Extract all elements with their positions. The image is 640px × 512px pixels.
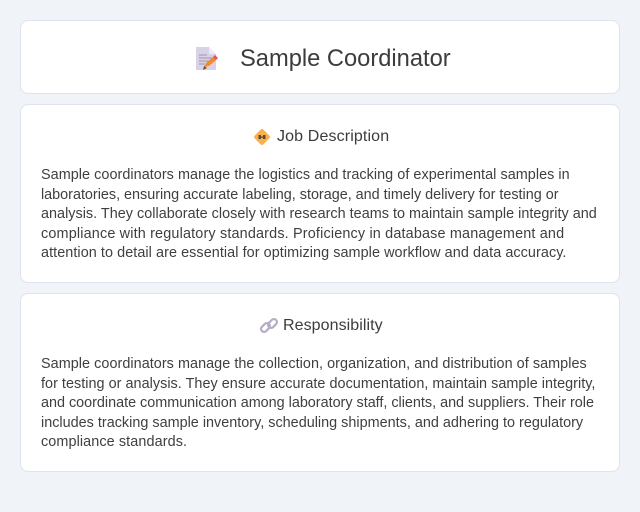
text block: job description: Sample coordinators manage the logistics and tracking of experimental samples in — [41, 167, 570, 183]
text block: responsibility: Sample coordinators manage the collection, organization, and distribution of samples — [41, 356, 587, 372]
heading: responsibility: Responsibility — [283, 317, 383, 334]
icon: orange diamond — [254, 129, 270, 145]
panel: responsibility — [20, 293, 620, 472]
icon: document with pencil — [196, 47, 218, 70]
text block: responsibility: and coordinate communication among laboratory staff, clients, and suppliers. Their role — [41, 395, 594, 411]
title: Sample Coordinator — [240, 46, 451, 72]
text block: responsibility — [41, 356, 595, 450]
text block: responsibility: includes tracking sample inventory, scheduling shipments, and adhering to regulatory — [41, 414, 583, 430]
text block: job description: laboratories, ensuring accurate labeling, storage, and timely delivery for testing or — [41, 186, 558, 202]
text block: job description: attention to detail are essential for optimizing sample workflow and data accuracy. — [41, 245, 566, 261]
text block: responsibility: compliance standards. — [41, 434, 187, 450]
text block: responsibility: for testing or analysis. They ensure accurate documentation, maintain sample integrity, — [41, 376, 595, 392]
heading: job description: Job Description — [277, 128, 389, 145]
text block: job description — [41, 167, 597, 261]
text block: job description: analysis. They collaborate closely with research teams to maintain sample integrity and — [41, 206, 597, 222]
panel: job description — [20, 104, 620, 283]
icon: chain link — [260, 318, 278, 333]
text block: job description: compliance with regulatory standards. Proficiency in database management and — [41, 226, 564, 242]
panel: title card — [20, 20, 620, 94]
